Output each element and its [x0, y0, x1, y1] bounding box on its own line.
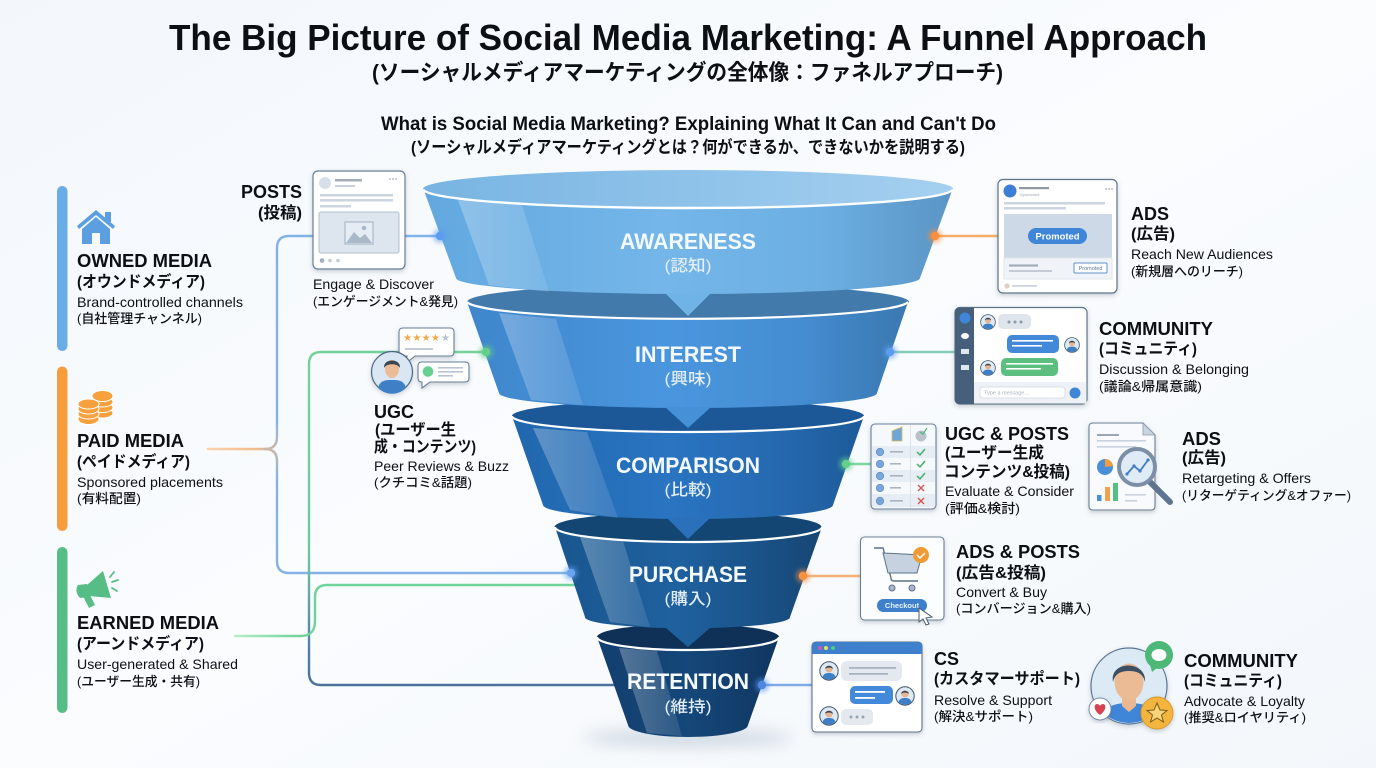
accent bar: earned: [57, 547, 68, 713]
text: community advocacy: Advocate & Loyalty: [1184, 693, 1305, 709]
text: ads reach: (広告): [1131, 225, 1175, 243]
subtitle question: (ソーシャルメディアマーケティングとは？何ができるか、できないかを説明する): [411, 137, 965, 157]
text: customer support: Resolve & Support: [934, 692, 1052, 708]
text: paid media: (ペイドメディア): [77, 452, 190, 471]
channel: customer support (retention): [812, 642, 1080, 732]
card: promoted ad mockup: Promoted: [1036, 232, 1080, 242]
card: chat window: [955, 308, 1087, 404]
channel: community (advocacy): [1089, 641, 1306, 729]
text: UGC description: [374, 402, 509, 490]
text: ads and posts: [956, 542, 1091, 616]
funnel stage: purchase: [554, 512, 822, 647]
funnel stage: interest: [467, 284, 909, 428]
connector: UGC to interest and retention: [309, 352, 630, 685]
text: owned media: (オウンドメディア): [77, 272, 205, 291]
card: promoted ad mockup: Promoted: [1079, 266, 1102, 272]
text: earned media: [77, 613, 238, 689]
card: support chat: [812, 642, 922, 732]
text: ads retargeting: (リターゲティング&オファー): [1182, 488, 1351, 503]
text: paid media: Sponsored placements: [77, 474, 223, 490]
text: community advocacy: (コミュニティ): [1184, 673, 1282, 690]
connector: earned media to purchase: [235, 585, 580, 636]
card: post mockup: [313, 171, 405, 269]
heading: posts: POSTS: [241, 182, 302, 202]
channel: community (interest): [955, 308, 1249, 404]
text: UGC and posts: (ユーザー生成: [945, 443, 1044, 462]
funnel shadow: [583, 730, 793, 746]
text: earned media: User-generated & Shared: [77, 656, 238, 672]
text: ads reach: Reach New Audiences: [1131, 246, 1273, 262]
channel: ads (retargeting): [1089, 423, 1351, 510]
text: UGC and posts: UGC & POSTS: [945, 424, 1069, 444]
funnel stage: purchase: PURCHASE: [629, 562, 747, 587]
text: ads retargeting: Retargeting & Offers: [1182, 470, 1311, 486]
title: [169, 17, 1207, 85]
text: community advocacy: [1184, 651, 1306, 725]
subtitle question: What is Social Media Marketing? Explaining What It Can and Can't Do: [381, 114, 996, 135]
text: UGC and posts: [944, 424, 1074, 516]
title: The Big Picture of Social Media Marketing: A Funnel Approach: [169, 17, 1207, 58]
text: community discussion: Discussion & Belonging: [1099, 361, 1249, 377]
text: community discussion: [1099, 319, 1249, 394]
card: chat window: Type a message...: [984, 390, 1029, 396]
connection dots: [433, 229, 942, 692]
accent bar: paid: [57, 366, 68, 531]
icon: reviewer with speech bubbles: [372, 328, 469, 394]
connectors: funnel to right channels: [762, 236, 998, 685]
subtitle question: [381, 114, 996, 157]
channel: UGC: [372, 328, 509, 490]
text: ads and posts: ADS & POSTS: [956, 542, 1080, 562]
text: ads reach: (新規層へのリーチ): [1131, 264, 1243, 279]
card: shopping cart: [860, 537, 944, 625]
funnel stage: interest: (興味): [664, 370, 712, 388]
text: paid media: [77, 431, 223, 506]
text: customer support: (カスタマーサポート): [934, 670, 1080, 688]
text: earned media: EARNED MEDIA: [77, 613, 219, 633]
text: ads reach: ADS: [1131, 204, 1169, 224]
heading: posts: [241, 182, 302, 222]
funnel stage: awareness: [423, 170, 953, 316]
text: UGC description: (ユーザー生: [375, 421, 456, 439]
channel: ads and posts (purchase): [860, 537, 1091, 625]
text: UGC description: Peer Reviews & Buzz: [374, 458, 509, 474]
heading: posts: (投稿): [258, 203, 302, 222]
text: posts description: (エンゲージメント&発見): [313, 294, 458, 309]
text: ads and posts: (コンバージョン&購入): [956, 601, 1091, 616]
text: customer support: (解決&サポート): [934, 709, 1033, 724]
card: promoted ad mockup: [998, 180, 1117, 293]
funnel stage: purchase: (購入): [664, 590, 712, 608]
card: comparison table: [871, 424, 936, 509]
channel: UGC and posts (comparison): [871, 424, 1074, 516]
text: customer support: CS: [934, 649, 959, 669]
text: ads retargeting: [1182, 429, 1351, 503]
text: ads and posts: (広告&投稿): [956, 563, 1046, 582]
text: UGC description: (クチコミ&話題): [374, 475, 472, 490]
title: (ソーシャルメディアマーケティングの全体像：ファネルアプローチ): [372, 60, 1003, 85]
text: UGC description: UGC: [374, 402, 414, 422]
funnel stage: comparison: COMPARISON: [616, 453, 760, 478]
icon: reviewer with speech bubbles: ★★★★: [403, 333, 440, 344]
funnel stage: retention: [597, 624, 779, 737]
text: ads and posts: Convert & Buy: [956, 584, 1047, 600]
text: ads retargeting: (広告): [1182, 449, 1226, 467]
icon: reviewer with speech bubbles: ★: [441, 333, 450, 344]
channel: posts: [241, 171, 458, 309]
funnel stage: awareness: AWARENESS: [620, 229, 756, 254]
connector: paid media to posts and purchase: [208, 236, 571, 573]
icon: house: [77, 210, 115, 244]
text: paid media: PAID MEDIA: [77, 431, 184, 451]
panel: owned media: [57, 186, 243, 351]
card: shopping cart: Checkout: [885, 601, 920, 610]
text: owned media: (自社管理チャンネル): [77, 311, 202, 326]
text: ads reach: [1131, 204, 1273, 279]
text: community advocacy: (推奨&ロイヤリティ): [1184, 710, 1306, 725]
funnel stage: interest: INTEREST: [635, 342, 742, 367]
text: UGC and posts: (評価&検討): [945, 501, 1020, 516]
text: UGC and posts: コンテンツ&投稿): [944, 462, 1070, 481]
funnel stage: retention: RETENTION: [627, 669, 749, 694]
text: owned media: OWNED MEDIA: [77, 251, 212, 271]
text: UGC and posts: Evaluate & Consider: [945, 483, 1074, 499]
icon: megaphone: [76, 571, 118, 608]
funnel stage: retention: (維持): [664, 698, 712, 716]
text: ads retargeting: ADS: [1182, 429, 1221, 449]
accent bar: owned: [57, 186, 68, 351]
text: owned media: [77, 251, 243, 326]
funnel stage: comparison: (比較): [664, 481, 712, 499]
text: paid media: (有料配置): [77, 491, 141, 506]
funnel stage: awareness: (認知): [664, 257, 712, 275]
text: UGC description: 成・コンテンツ): [374, 437, 476, 456]
icon: coins: [78, 390, 113, 424]
funnel stage: comparison: [512, 400, 864, 539]
text: earned media: (ユーザー生成・共有): [77, 674, 200, 689]
funnel: [423, 170, 953, 737]
icon: advocate avatar with badges: [1089, 641, 1173, 729]
text: community discussion: (コミュニティ): [1099, 341, 1197, 358]
text: posts description: [313, 276, 458, 309]
text: customer support: [934, 649, 1080, 724]
panel: paid media: [57, 366, 223, 531]
panel: earned media: [57, 547, 238, 713]
card: promoted ad mockup: Sponsored: [1020, 192, 1039, 197]
text: posts description: Engage & Discover: [313, 276, 434, 292]
text: community advocacy: COMMUNITY: [1184, 651, 1298, 671]
text: earned media: (アーンドメディア): [77, 634, 204, 653]
text: community discussion: COMMUNITY: [1099, 319, 1213, 339]
text: community discussion: (議論&帰属意識): [1099, 379, 1202, 394]
channel: ads (awareness): [998, 180, 1273, 293]
text: owned media: Brand-controlled channels: [77, 294, 243, 310]
icon: report with magnifier: [1089, 423, 1170, 510]
